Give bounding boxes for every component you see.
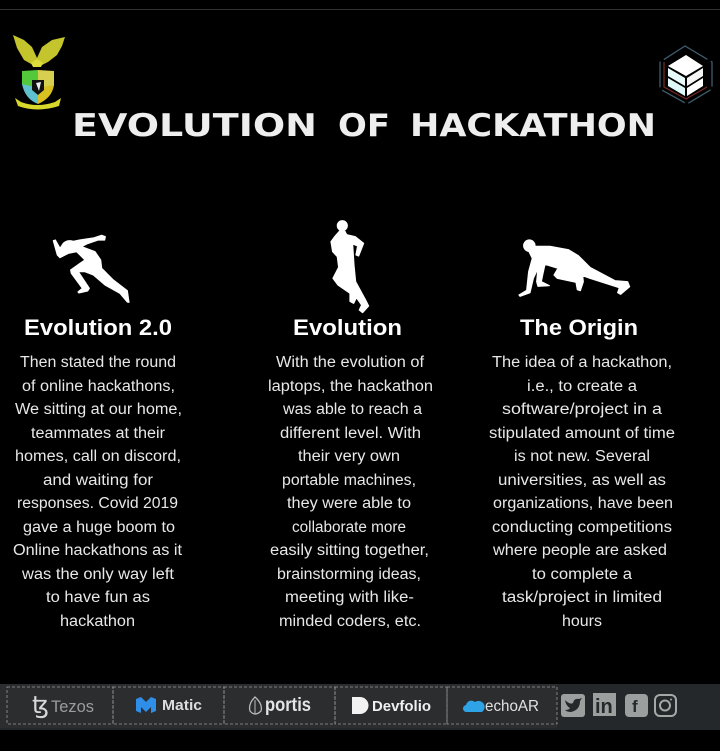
sponsor: portis: portis [265,695,311,716]
text block: they were able to [287,495,411,512]
text block: portable machines, [282,472,416,489]
sponsor: Tezos: Tezos [51,698,94,716]
text block: laptops, the hackathon [268,378,433,395]
panel: Evolution [268,221,433,630]
text block: to have fun as [46,589,150,606]
icon: linkedin [593,693,616,718]
text block: different level. With [280,425,421,442]
text block: to complete a [532,566,632,583]
text block: where people are asked [492,542,667,559]
title: EVOLUTION [72,108,317,144]
text block: easily sitting together, [270,542,429,559]
title [72,108,656,144]
text block: Online hackathons as it [13,542,183,559]
text block: is not new. Several [514,448,650,465]
text block: Then stated the round [20,354,176,371]
text block: their very own [298,448,400,465]
text block: We sitting at our home, [15,401,182,418]
sponsor: Matic: Matic [162,697,202,714]
heading: The Origin [520,315,638,340]
text block: homes, call on discord, [15,448,181,465]
text block: i.e., to create a [527,378,637,395]
sponsor: Devfolio: Devfolio [372,699,431,715]
sponsor: echoAR [463,698,539,715]
text block: stipulated amount of time [489,425,675,442]
panel: sponsor footer bar [0,684,720,730]
heading: Evolution 2.0 [24,315,172,340]
text block: universities, as well as [498,472,666,489]
text block: conducting competitions [492,519,672,536]
text block: teammates at their [31,425,165,442]
text block: gave a huge boom to [23,519,175,536]
text block: The idea of a hackathon, [492,354,672,371]
text block: and waiting for [43,472,153,489]
text block [268,354,433,630]
title: HACKATHON [410,108,656,144]
panel: Evolution 2.0 [13,235,183,630]
panel: The Origin [489,240,675,630]
icon: crouching start silhouette [519,240,630,296]
text block: responses. Covid 2019 [17,495,178,512]
text block [13,354,183,630]
icon: sprinter silhouette [53,235,129,302]
sponsor: Devfolio [352,697,431,715]
sponsor: portis [250,695,311,716]
icon: twitter [561,694,585,717]
icon: facebook [625,694,648,717]
icon: runner silhouette [331,221,369,313]
text block: With the evolution of [276,354,425,371]
sponsor: Tezos: ꜩ [32,693,49,719]
sponsor: Tezos [32,693,94,719]
sponsor: Matic [136,697,202,714]
icon: instagram [655,695,676,716]
text block: was able to reach a [282,401,422,418]
heading: Evolution [293,315,402,340]
icon: facebook: f [632,697,638,716]
text block: brainstorming ideas, [277,566,421,583]
text block: of online hackathons, [22,378,175,395]
text block [489,354,675,630]
icon: college crest logo [13,35,65,110]
text block: task/project in limited [502,589,662,606]
icon: linkedin: in [595,696,613,718]
text block: hours [562,613,602,630]
text block: was the only way left [21,566,175,583]
text block: software/project in a [502,401,662,418]
icon: cube logo [660,46,712,104]
text block: meeting with like- [285,589,414,606]
text block: organizations, have been [493,495,673,512]
sponsor: echoAR: echoAR [485,698,539,715]
text block: hackathon [60,613,135,630]
text block: minded coders, etc. [279,613,421,630]
text block: collaborate more [292,519,406,536]
title: OF [338,108,390,144]
